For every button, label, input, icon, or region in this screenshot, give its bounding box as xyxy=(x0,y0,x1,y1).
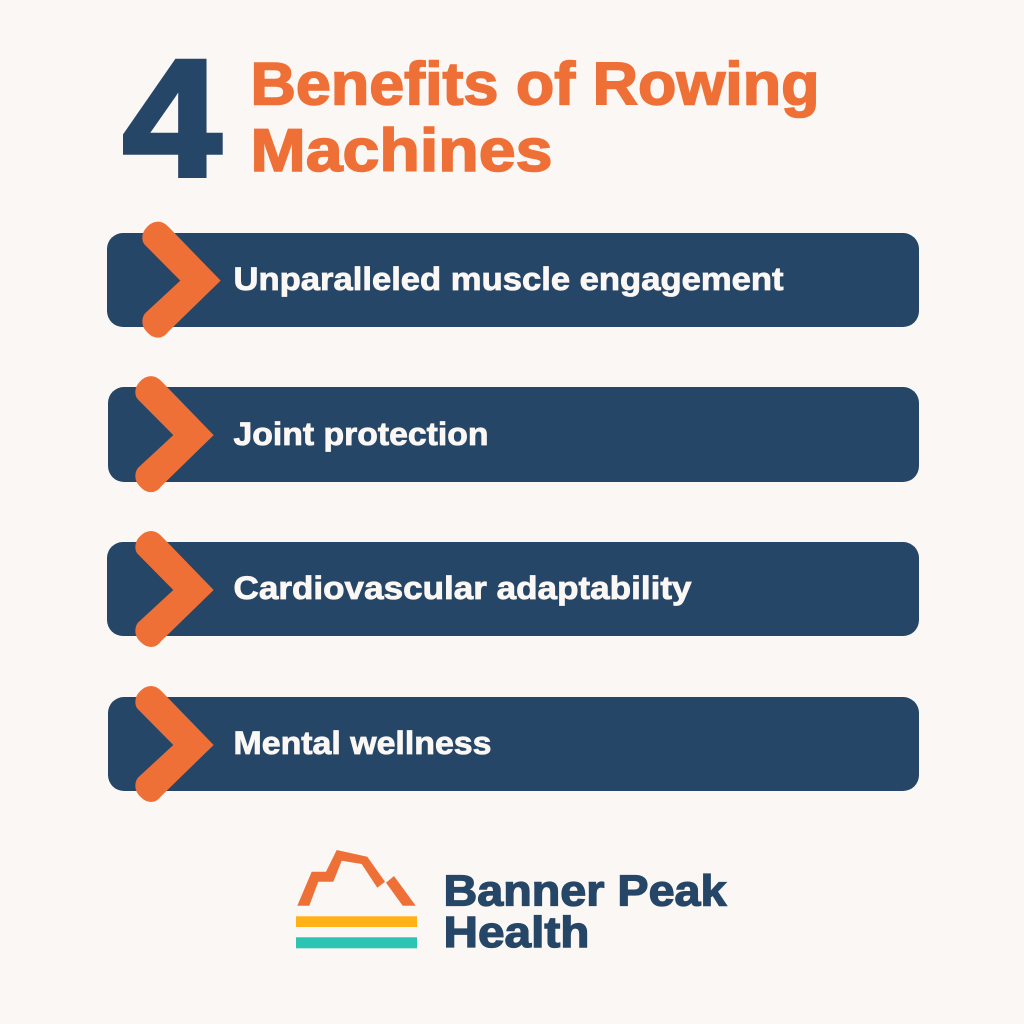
icon: chevron 1 xyxy=(142,222,221,338)
title xyxy=(123,26,820,212)
heading text: Benefits of Rowing xyxy=(250,50,820,118)
panel: mental wellness xyxy=(108,686,919,802)
icon: chevron 3 xyxy=(135,531,214,647)
panel: unparalleled muscle engagement xyxy=(107,222,919,338)
panel: cardiovascular adaptability xyxy=(107,531,919,647)
icon: teal stripe xyxy=(296,937,417,948)
panel: joint protection xyxy=(108,376,919,492)
logo text xyxy=(444,866,727,957)
heading text: Machines xyxy=(250,117,552,184)
heading text xyxy=(250,50,820,184)
logo: Banner Peak Health xyxy=(296,850,727,957)
icon: mountain xyxy=(297,850,416,906)
label 1: Unparalleled muscle engagement xyxy=(234,261,784,297)
big number 4: 4 xyxy=(123,26,221,212)
label 2: Joint protection xyxy=(234,416,488,452)
logo text: Banner Peak xyxy=(444,866,727,916)
label 4: Mental wellness xyxy=(234,725,492,761)
icon: chevron 4 xyxy=(135,686,214,802)
icon: yellow stripe xyxy=(296,916,417,927)
label 3: Cardiovascular adaptability xyxy=(234,570,692,606)
icon: chevron 2 xyxy=(135,376,214,492)
logo text: Health xyxy=(444,908,590,957)
